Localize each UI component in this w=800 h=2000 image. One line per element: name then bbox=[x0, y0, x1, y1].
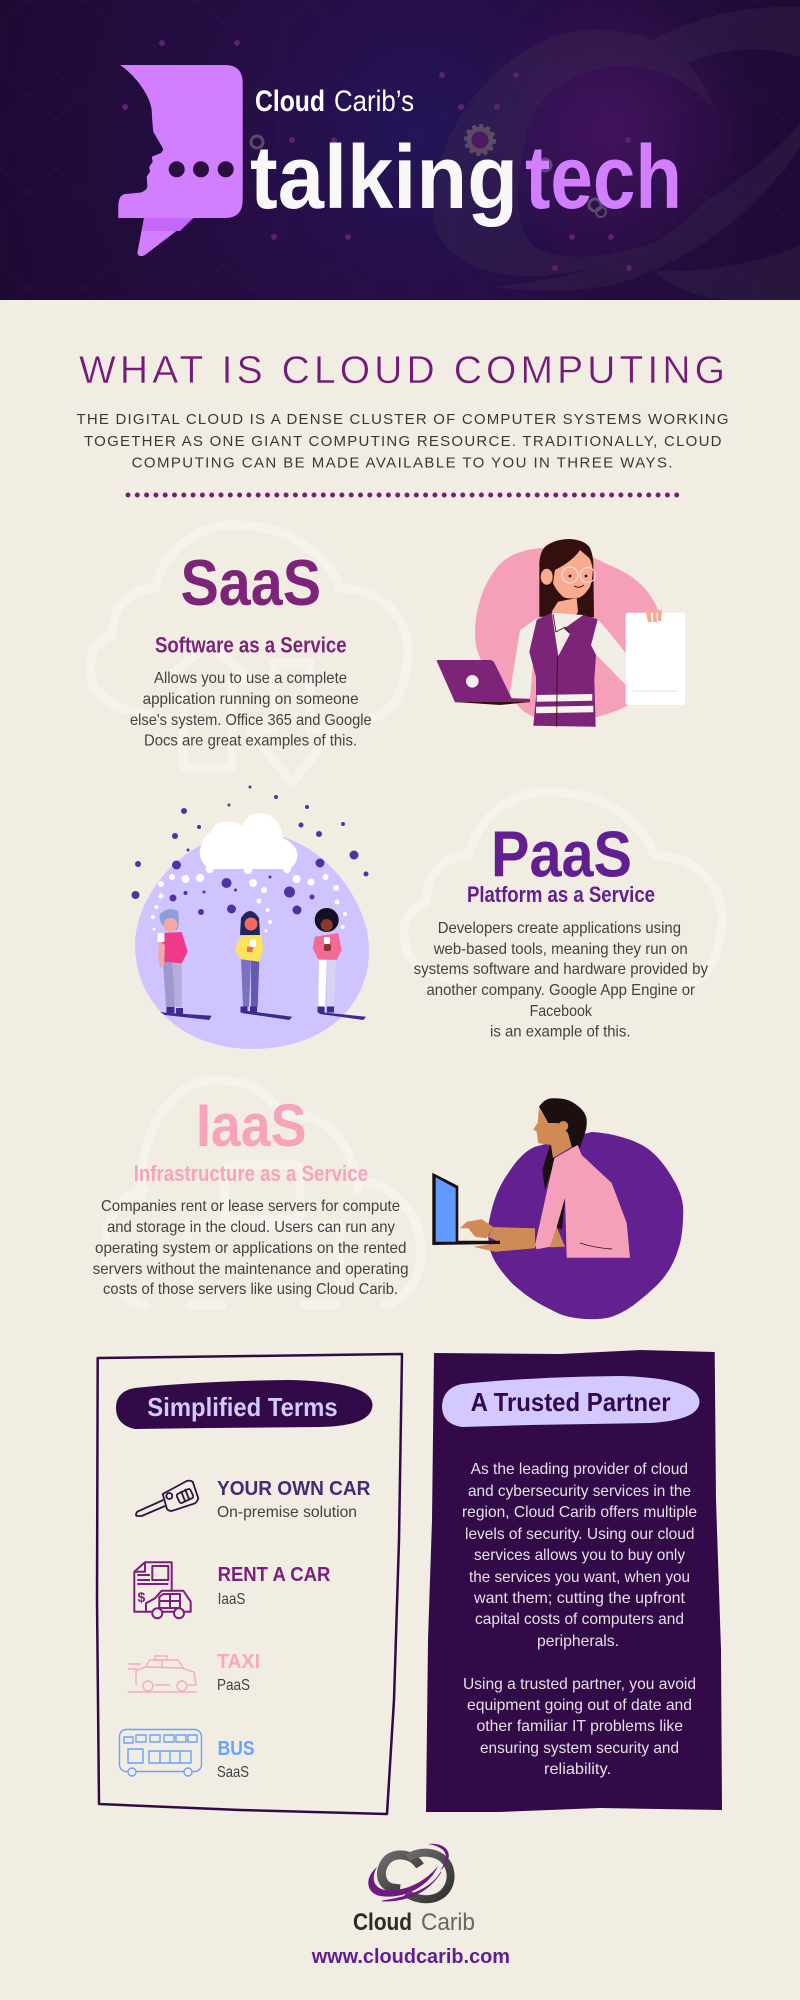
term: taxi: PaaS bbox=[217, 1677, 250, 1694]
panel body text bbox=[462, 1461, 697, 1778]
SaaS section text: Software as a Service bbox=[155, 633, 347, 658]
PaaS section text: web-based tools, meaning they run on bbox=[433, 941, 688, 958]
logo wordmark: Carib’s bbox=[334, 85, 414, 118]
IaaS section text: IaaS bbox=[196, 1092, 306, 1159]
dotted divider bbox=[128, 492, 677, 498]
intro paragraph bbox=[76, 411, 728, 472]
white cloud bbox=[200, 813, 298, 874]
IaaS section text: servers without the maintenance and operating bbox=[93, 1261, 409, 1278]
panel: simplified terms bbox=[97, 1354, 402, 1814]
title: WHAT IS CLOUD COMPUTING bbox=[79, 349, 725, 392]
logo: talking head speech bubble bbox=[118, 65, 243, 256]
term: your own car: On-premise solution bbox=[217, 1504, 357, 1521]
watermark: PaaS cloud bbox=[404, 792, 722, 984]
panel body text: As the leading provider of cloud bbox=[471, 1461, 688, 1478]
watermark: SaaS cloud with arrows bbox=[90, 525, 408, 783]
person 3 bbox=[313, 908, 366, 1020]
PaaS section text: systems software and hardware provided by bbox=[414, 961, 708, 978]
indigo data dots bbox=[132, 786, 368, 915]
IaaS section text: and storage in the cloud. Users can run any bbox=[107, 1219, 395, 1236]
logo wordmark bbox=[250, 85, 682, 228]
icon: rental document and car: $ bbox=[138, 1589, 146, 1605]
panel body text: levels of security. Using our cloud bbox=[465, 1526, 694, 1543]
term: your own car bbox=[217, 1478, 371, 1521]
panel body text: capital costs of computers and bbox=[475, 1611, 684, 1628]
PaaS section text: Facebook bbox=[530, 1003, 593, 1020]
IaaS section text: Infrastructure as a Service bbox=[134, 1161, 368, 1186]
white rain dots bbox=[151, 874, 347, 932]
panel body text: reliability. bbox=[544, 1761, 611, 1778]
footer logo: cloud carib: Cloud bbox=[353, 1909, 412, 1936]
logo wordmark: tech bbox=[525, 128, 682, 228]
person 2 bbox=[235, 911, 292, 1020]
PaaS section text: Platform as a Service bbox=[467, 882, 655, 907]
illustration: people under cloud bbox=[132, 786, 369, 1049]
heading pill: a trusted partner: A Trusted Partner bbox=[471, 1387, 671, 1417]
panel body text: equipment going out of date and bbox=[467, 1697, 692, 1714]
illustration: woman with laptop and paper bbox=[437, 539, 685, 727]
term: bus bbox=[217, 1738, 255, 1781]
term: your own car: YOUR OWN CAR bbox=[217, 1478, 371, 1500]
intro paragraph: TOGETHER AS ONE GIANT COMPUTING RESOURCE. TRADITIONALLY, CLOUD bbox=[84, 433, 722, 450]
panel body text: the services you want, when you bbox=[469, 1569, 690, 1586]
SaaS section text: Docs are great examples of this. bbox=[144, 732, 357, 750]
icon: taxi bbox=[128, 1656, 197, 1692]
illustration: woman at laptop bbox=[432, 1098, 683, 1319]
heading pill: simplified terms bbox=[116, 1380, 372, 1429]
intro paragraph: COMPUTING CAN BE MADE AVAILABLE TO YOU IN THREE WAYS. bbox=[132, 454, 673, 472]
panel body text: region, Cloud Carib offers multiple bbox=[462, 1504, 697, 1521]
intro paragraph: THE DIGITAL CLOUD IS A DENSE CLUSTER OF COMPUTER SYSTEMS WORKING bbox=[76, 411, 728, 428]
panel body text: services allows you to buy only bbox=[474, 1547, 685, 1564]
icon: car key bbox=[136, 1481, 198, 1516]
IaaS section text bbox=[93, 1092, 409, 1298]
website url: www.cloudcarib.com bbox=[311, 1946, 510, 1968]
IaaS section text: costs of those servers like using Cloud Carib. bbox=[103, 1281, 398, 1298]
panel body text: Using a trusted partner, you avoid bbox=[463, 1676, 696, 1693]
background gears bbox=[251, 126, 606, 217]
PaaS section text: another company. Google App Engine or bbox=[426, 982, 696, 999]
term: taxi bbox=[217, 1651, 260, 1694]
panel body text: want them; cutting the upfront bbox=[473, 1590, 686, 1607]
heading pill: simplified terms: Simplified Terms bbox=[147, 1392, 338, 1422]
person 1 bbox=[158, 909, 212, 1020]
panel body text: other familiar IT problems like bbox=[476, 1718, 683, 1735]
IaaS section text: Companies rent or lease servers for compute bbox=[101, 1198, 400, 1215]
footer logo: cloud carib: Carib bbox=[421, 1909, 475, 1936]
SaaS section text: SaaS bbox=[180, 546, 321, 619]
PaaS section text bbox=[414, 818, 708, 1041]
term: rent a car: IaaS bbox=[218, 1591, 245, 1608]
term: taxi: TAXI bbox=[217, 1651, 260, 1673]
term: rent a car bbox=[218, 1564, 331, 1608]
term: rent a car: RENT A CAR bbox=[218, 1564, 331, 1586]
PaaS section text: is an example of this. bbox=[490, 1024, 630, 1041]
background network dots bbox=[122, 40, 632, 271]
logo rings bbox=[381, 1853, 451, 1899]
panel body text: ensuring system security and bbox=[480, 1740, 679, 1757]
background swirl logo bbox=[433, 7, 800, 300]
SaaS section text: else's system. Office 365 and Google bbox=[130, 712, 372, 729]
logo wordmark: Cloud bbox=[255, 85, 325, 118]
panel body text: peripherals. bbox=[537, 1633, 619, 1650]
heading pill: a trusted partner bbox=[442, 1376, 700, 1427]
panel: a trusted partner bbox=[426, 1350, 722, 1812]
icon: rental document and car bbox=[134, 1562, 191, 1618]
header banner bbox=[0, 0, 800, 300]
term: bus: BUS bbox=[218, 1738, 255, 1760]
PaaS section text: PaaS bbox=[491, 818, 632, 891]
watermark: IaaS server cloud bbox=[105, 1080, 421, 1305]
logo wordmark: talking bbox=[250, 128, 518, 228]
panel body text: and cybersecurity services in the bbox=[468, 1483, 691, 1500]
IaaS section text: operating system or applications on the rented bbox=[95, 1240, 406, 1257]
icon: bus bbox=[120, 1730, 202, 1776]
SaaS section text: application running on someone bbox=[143, 691, 359, 708]
SaaS section text: Allows you to use a complete bbox=[154, 670, 347, 687]
term: bus: SaaS bbox=[217, 1764, 249, 1781]
logo swoosh bbox=[368, 1844, 449, 1901]
PaaS section text: Developers create applications using bbox=[438, 920, 681, 937]
footer logo: cloud carib bbox=[353, 1844, 475, 1936]
SaaS section text bbox=[130, 546, 372, 750]
